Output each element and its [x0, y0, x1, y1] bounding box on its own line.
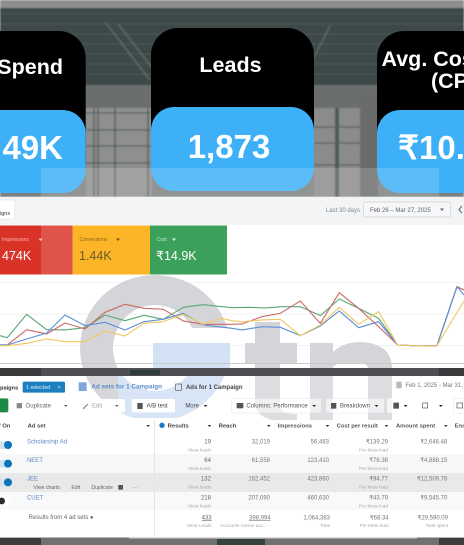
- line: conversions (yellow): [0, 301, 464, 346]
- cost per result column: ₹43.79: [369, 494, 389, 501]
- impressions column: 460,630: [307, 495, 330, 501]
- results column: 218: [201, 495, 212, 501]
- column headers: Results: [168, 424, 189, 430]
- column headers: [267, 424, 464, 430]
- chart: daily performance lines: [0, 287, 464, 346]
- results subtext: Meta leads: [188, 466, 212, 471]
- impressions column: [303, 439, 331, 521]
- toolbar: left actions: More: [185, 404, 200, 410]
- metric tile: Impressions: [0, 226, 72, 274]
- table: ad sets left columns: [0, 423, 237, 528]
- toolbar: left actions: A/B test: [147, 404, 168, 410]
- amount spent column: ₹9,545.70: [420, 494, 448, 501]
- reach column: 398,994: [249, 515, 271, 521]
- results subtext: Meta Leads: [187, 523, 212, 528]
- results column: 64: [204, 458, 212, 464]
- tab: ads: Ads for 1 Campaign: [186, 385, 243, 391]
- summary label: Results from 4 ad sets ●: [29, 515, 94, 521]
- column headers: Cost per result: [337, 424, 378, 430]
- columns button: [231, 398, 321, 413]
- cost subtext: [220, 447, 449, 528]
- band: photo strip between panels: [0, 368, 464, 376]
- metric tile: Impressions: Impressions: [2, 237, 29, 243]
- toolbar: left actions: [0, 398, 207, 412]
- results column: [201, 439, 212, 521]
- metric card: Avg. Cost (CPL): ₹10.: [398, 129, 464, 166]
- badge: 1 selected: ×: [58, 385, 61, 391]
- reach column: 182,452: [248, 477, 271, 483]
- cost per result column: ₹139.29: [366, 438, 389, 445]
- button: campaigns tab: igns: [0, 211, 10, 217]
- results subtext: Meta leads: [188, 503, 212, 508]
- line: cost (green): [0, 287, 464, 346]
- cost subtext: Total spent: [425, 523, 449, 528]
- breakdown button: [326, 398, 384, 413]
- row names: NEET: [27, 458, 43, 464]
- metric card: Leads: Leads: [199, 53, 262, 77]
- watermark: tile highlight: [41, 226, 72, 274]
- metric card: Leads: 1,873: [188, 128, 270, 165]
- metric tile: Conversions: 1.44K: [79, 249, 112, 263]
- row names: CUET: [27, 495, 44, 501]
- cost subtext: Per Meta lead: [359, 466, 388, 471]
- panel: Google Ads performance chart: [0, 197, 464, 368]
- column headers: Ad set: [28, 424, 46, 430]
- tab: campaigns: paigns: [0, 385, 18, 391]
- cost subtext: Total: [320, 523, 330, 528]
- band: photo strip at bottom: [0, 537, 464, 545]
- date range selector: Feb 26 – Mar 27, 2025: [370, 208, 431, 214]
- row actions: Edit: [71, 485, 81, 491]
- cost per result column: ₹76.38: [369, 457, 389, 464]
- metric tile: Cost: ₹14.9K: [156, 249, 197, 263]
- row names: Scholarship Ad: [27, 439, 67, 445]
- badge: 1 selected: [23, 382, 65, 393]
- results subtext: [187, 447, 212, 528]
- reach column: 61,558: [252, 458, 271, 464]
- row names: JEE: [27, 477, 38, 483]
- line: clicks (blue): [0, 287, 464, 346]
- toolbar and tabs: [0, 382, 243, 412]
- metric tile: Cost: [150, 226, 227, 274]
- table header and row backgrounds: [0, 420, 464, 538]
- cost subtext: Per Meta lead: [359, 447, 388, 452]
- background photo: warehouse interior: [0, 0, 464, 197]
- date range selector: [326, 202, 462, 217]
- watermark logo over chart: [80, 275, 392, 368]
- column headers: [0, 423, 237, 430]
- cost per result column: [366, 438, 389, 521]
- line: impressions (red): [0, 287, 464, 346]
- metric tile: Conversions: Conversions: [80, 237, 108, 243]
- panel: Meta Ads Manager table: [0, 376, 464, 538]
- reach column: 32,019: [252, 439, 271, 445]
- breakdown button: Breakdown: [340, 404, 370, 410]
- metric card: Spend: 49K: [2, 129, 63, 166]
- cost subtext: Per Meta lead: [359, 485, 388, 490]
- amount spent column: ₹12,509.78: [417, 476, 448, 483]
- impressions column: 123,410: [307, 458, 330, 464]
- tab: ad sets: Ad sets for 1 Campaign: [91, 384, 162, 391]
- metric card: Spend: [0, 31, 86, 193]
- row actions: [33, 485, 138, 491]
- columns button: Columns: Performance: [246, 404, 308, 410]
- export icons: [387, 398, 464, 413]
- column headers: Reach: [219, 424, 237, 430]
- cost per result column: ₹68.34: [370, 514, 389, 521]
- amount spent column: ₹29,590.09: [418, 514, 449, 521]
- cost subtext: Accounts Center acc...: [220, 523, 267, 528]
- cost subtext: Per Meta lead: [360, 523, 389, 528]
- row actions: Duplicate: [91, 485, 113, 491]
- results column: 433: [202, 515, 212, 521]
- amount spent column: ₹2,646.48: [420, 438, 448, 445]
- row toggles: [0, 441, 12, 505]
- chart baseline: [0, 363, 464, 364]
- reach column: 207,090: [248, 495, 271, 501]
- metric tile: Impressions: 474K: [2, 249, 32, 263]
- toolbar: left actions: Edit: [92, 404, 103, 410]
- toolbar: right actions and date: [231, 382, 464, 413]
- row names: [27, 439, 67, 501]
- watermark band over photo: [41, 168, 439, 197]
- tab: ad sets: [79, 382, 162, 391]
- metric card: Leads: [151, 28, 314, 191]
- cost per result column: ₹94.77: [369, 476, 389, 483]
- impressions column: 423,860: [307, 477, 330, 483]
- button: campaigns tab: [0, 200, 15, 219]
- column headers: Impressions: [278, 424, 312, 430]
- impressions column: 1,064,383: [303, 515, 331, 521]
- column headers: Amount spent: [396, 424, 435, 430]
- toolbar: left actions: Duplicate: [26, 404, 52, 410]
- amount spent column: [417, 438, 449, 521]
- watermark logo over table: [86, 376, 392, 420]
- row actions: View charts: [33, 485, 60, 491]
- metric tile: Cost: Cost: [156, 237, 167, 243]
- impressions column: 56,483: [311, 439, 330, 445]
- table: ad sets right columns: [220, 424, 464, 528]
- results subtext: Meta leads: [188, 447, 212, 452]
- badge: 1 selected: 1 selected: [26, 385, 50, 391]
- reach column: [248, 439, 271, 521]
- metric card: Avg. Cost (CPL): [377, 31, 464, 193]
- cost subtext: Per Meta lead: [359, 503, 388, 508]
- row actions: ···: [133, 485, 138, 491]
- date range selector: Last 30 days: [326, 208, 360, 214]
- results subtext: Meta leads: [188, 485, 212, 490]
- metric tile: Conversions: [72, 226, 150, 274]
- results column: 132: [201, 477, 212, 483]
- amount spent column: ₹4,888.15: [420, 457, 448, 464]
- results column: 19: [204, 439, 212, 445]
